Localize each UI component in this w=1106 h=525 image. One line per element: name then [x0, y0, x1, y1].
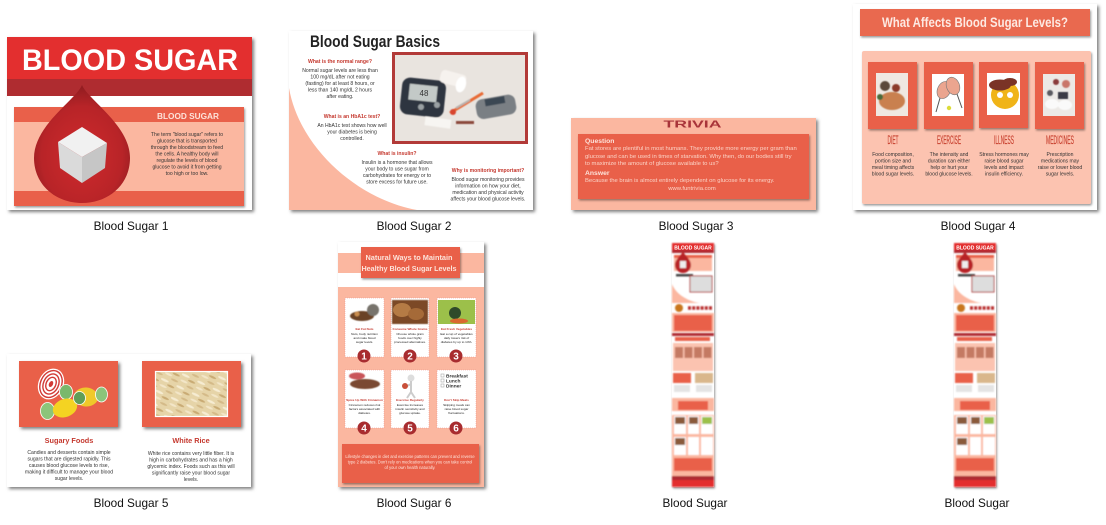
text block: HbA1c test	[317, 114, 387, 142]
text block: monitoring: information on how your diet,	[455, 184, 521, 190]
question and answer text: Answer	[585, 170, 610, 177]
step 1: sugar levels.	[356, 340, 373, 344]
step 3: daily lowers risk of	[444, 336, 469, 340]
caption: Blood Sugar 2: Blood Sugar 2	[377, 219, 451, 233]
card: exercise	[924, 62, 973, 178]
question and answer text: glucose and can be used in times of starvation. Why then, do our bodies still try	[585, 154, 792, 160]
text block: monitoring: Blood sugar monitoring provides	[451, 177, 525, 183]
panel: Blood Sugar 4 slide	[853, 4, 1097, 210]
card: medicines: sugar levels.	[1046, 172, 1074, 178]
step 5: glucose uptake.	[399, 411, 421, 415]
step 1: and make blood	[353, 336, 376, 340]
text block: normal range: less than 140 mg/dL 2 hours	[308, 88, 372, 94]
panel: Blood Sugar 3 trivia slide	[571, 118, 816, 210]
text block: white rice: glycemic index. Foods such as this will	[147, 464, 235, 470]
step 5	[391, 370, 429, 434]
step 6: Dinner	[446, 384, 461, 390]
header stripe	[7, 79, 252, 96]
text block: white rice: levels.	[184, 477, 198, 483]
text block: white rice: significantly raise your blood sugar	[152, 470, 230, 476]
text block: insulin: your body to use sugar from	[365, 166, 429, 172]
card: medicines: medications may	[1041, 158, 1080, 164]
description text: too high or too low.	[166, 171, 208, 177]
photo: glucose meter	[394, 54, 526, 142]
thumbnail title: BLOOD SUGAR	[674, 246, 712, 252]
step 3: Eat Fresh Vegetables	[441, 327, 472, 331]
step 5: insulin sensitivity and	[395, 407, 425, 411]
card: white rice image	[142, 361, 241, 427]
text block: sugary foods: sugar levels.	[55, 476, 83, 482]
text block: monitoring	[451, 168, 525, 202]
header: Natural Ways to Maintain	[366, 253, 452, 262]
icon: blood drop with sugar cube	[34, 85, 130, 203]
card: medicines	[1035, 62, 1084, 178]
step 6: Skipping meals can	[443, 403, 470, 407]
step 3	[437, 298, 476, 362]
text block: insulin: store excess for future use.	[366, 180, 428, 186]
step 6	[437, 370, 476, 434]
question and answer text	[585, 138, 797, 192]
card: exercise: help or hurt your	[930, 165, 968, 171]
step 2: Consume Whole Grains	[393, 327, 428, 331]
caption: Blood Sugar A: Blood Sugar	[663, 496, 728, 510]
text block: HbA1c test: controlled.	[340, 136, 364, 142]
step 5: 5	[407, 424, 413, 434]
description text: through the bloodstream to feed	[151, 145, 223, 151]
question and answer text: Because the brain is almost entirely dependent on glucose for its energy.	[585, 178, 775, 184]
text block: sugary foods: causes blood glucose levels to rise,	[29, 463, 109, 469]
text block: sugary foods: Candies and desserts contain simple	[27, 450, 111, 456]
text block: white rice: high in carbohydrates and has a high	[149, 458, 233, 464]
step 2: Choose whole grain	[396, 332, 424, 336]
text block: normal range	[302, 59, 378, 100]
card: sugary foods image	[19, 361, 118, 427]
text block: white rice: White rice contains very little fiber. It is	[148, 451, 235, 457]
content panel	[14, 107, 244, 206]
panel: full infographic thumbnail B	[954, 243, 996, 487]
content panel	[862, 51, 1091, 204]
thumbnail title: BLOOD SUGAR	[956, 246, 994, 252]
step 4	[345, 370, 384, 434]
card: exercise: The intensity and	[930, 152, 969, 158]
step 6: fluctuations.	[448, 411, 465, 415]
caption: Blood Sugar 3: Blood Sugar 3	[659, 219, 734, 233]
text block: normal range: after eating.	[327, 94, 353, 100]
card: medicines: Prescription	[1047, 152, 1074, 158]
step 6: Lunch	[446, 378, 460, 384]
text block: insulin: Insulin is a hormone that allows	[361, 160, 433, 166]
text block: normal range: What is the normal range?	[308, 59, 372, 65]
panel: Blood Sugar 6 slide	[338, 242, 484, 487]
step 4: factors associated with	[349, 407, 380, 411]
step 5: Exercise Regularly	[396, 398, 424, 402]
description text: regulate the levels of blood	[157, 158, 218, 164]
caption: Blood Sugar 4: Blood Sugar 4	[941, 219, 1016, 233]
photo: glucose meter: 48	[420, 89, 429, 98]
card: exercise: duration can either	[928, 158, 970, 164]
caption: Blood Sugar 1: Blood Sugar 1	[94, 219, 168, 233]
panel: full infographic thumbnail A	[672, 243, 714, 487]
text block: normal range: 100 mg/dL after not eating	[310, 74, 370, 80]
text block: HbA1c test: An HbA1c test shows how well	[317, 123, 387, 129]
title: BLOOD SUGAR	[22, 44, 238, 77]
description text: The term "blood sugar" refers to	[151, 132, 223, 138]
step 4: diabetes.	[358, 411, 371, 415]
footer message: of your own health naturally.	[385, 465, 436, 470]
step 3: diabetes by up to 14%.	[441, 340, 472, 344]
text block: monitoring: Why is monitoring important?	[452, 168, 524, 174]
trivia card	[578, 134, 809, 199]
step 6: 6	[453, 424, 459, 434]
text block: insulin	[361, 151, 433, 186]
step 6: raise blood sugar	[445, 407, 468, 411]
panel: Blood Sugar 2 slide	[289, 31, 533, 210]
text block: sugary foods: sugars that are digested rapidly. This	[27, 456, 111, 462]
step 4: 4	[361, 424, 367, 434]
footer message: type 2 diabetes. Don't rely on medications when you can take control	[348, 460, 472, 464]
text block: insulin: What is insulin?	[377, 151, 417, 157]
text block: sugary foods	[25, 436, 113, 482]
card: exercise: EXERCISE	[937, 133, 961, 147]
card: diet: blood sugar levels.	[872, 172, 914, 178]
step 2	[391, 298, 429, 362]
text block: sugary foods: making it difficult to manage your blood	[25, 470, 113, 476]
question and answer text: Fat stores are plentiful in most humans. They provide more energy per gram than	[585, 146, 797, 152]
description text: glucose that is transported	[157, 138, 217, 144]
step 6: Breakfast	[446, 374, 468, 380]
subheading band	[14, 107, 244, 122]
footer message	[342, 444, 479, 483]
text block: white rice: White Rice	[172, 436, 210, 445]
step 1	[345, 298, 384, 362]
card: diet: DIET	[888, 133, 899, 147]
text block: HbA1c test: your diabetes is being	[327, 130, 377, 136]
question and answer text: www.funtrivia.com	[667, 186, 716, 192]
description text: glucose to avoid it from getting	[152, 164, 222, 170]
footer message: Lifestyle changes in diet and exercise patterns can prevent and reverse	[345, 454, 475, 459]
curved background	[289, 88, 417, 210]
card: diet	[868, 62, 917, 178]
card: diet: Food composition,	[872, 152, 914, 158]
step 4: Spice Up With Cinnamon	[346, 398, 383, 402]
header band	[860, 9, 1090, 36]
step 1: Nuts, body nutrition	[351, 332, 378, 336]
step 2: foods over highly	[398, 336, 422, 340]
card: illness	[979, 62, 1029, 178]
header	[361, 247, 460, 278]
step 3: Eat a cup of vegetables	[440, 332, 473, 336]
step 5: Exercise Increases	[397, 403, 424, 407]
card: exercise: blood glucose levels.	[925, 172, 973, 178]
step 2: 2	[407, 352, 413, 362]
description text	[151, 132, 223, 177]
question and answer text: Question	[585, 138, 614, 145]
card: diet: portion size and	[875, 158, 911, 164]
caption: Blood Sugar 5: Blood Sugar 5	[94, 496, 169, 510]
question and answer text: to maximize the amount of glucose available to us?	[585, 161, 719, 167]
text block: monitoring: medication and physical activity	[452, 190, 524, 196]
step 1: Eat Fat Nuts	[355, 327, 374, 331]
trivia title: TRIVIA	[664, 120, 722, 130]
caption: Blood Sugar 6: Blood Sugar 6	[377, 496, 452, 510]
card: illness: ILLNESS	[994, 133, 1014, 147]
caption: Blood Sugar B: Blood Sugar	[945, 496, 1010, 510]
step 6: Don't Skip Meals	[444, 398, 469, 402]
description text: the cells. A healthy body will	[155, 152, 219, 158]
step 4: Cinnamon reduces risk	[349, 403, 381, 407]
subheading: BLOOD SUGAR	[157, 112, 219, 121]
title: Blood Sugar Basics	[310, 32, 440, 51]
text block: normal range: Normal sugar levels are less than	[302, 68, 378, 74]
card: illness: insulin efficiency.	[985, 172, 1023, 178]
title: What Affects Blood Sugar Levels?	[882, 14, 1068, 30]
step 1: 1	[361, 352, 367, 362]
card: illness: raise blood sugar	[984, 158, 1024, 164]
text block: white rice	[147, 436, 235, 483]
footer band	[14, 191, 244, 206]
card: illness: Stress hormones may	[979, 152, 1029, 158]
step 2: processed alternatives.	[394, 340, 426, 344]
panel: Blood Sugar 1 slide	[7, 37, 252, 210]
card: illness: levels and impact	[984, 165, 1024, 171]
header band	[7, 37, 252, 79]
text block: HbA1c test: What is an HbA1c test?	[324, 114, 380, 120]
step 3: 3	[453, 352, 459, 362]
panel: Blood Sugar 5 slide	[7, 354, 251, 487]
text block: insulin: carbohydrates for energy or to	[363, 173, 431, 179]
text block: sugary foods: Sugary Foods	[45, 436, 93, 445]
text block: monitoring: affects your blood glucose levels.	[451, 196, 525, 202]
card: medicines: raise or lower blood	[1038, 165, 1082, 171]
text block: normal range: (fasting) for at least 8 hours, or	[305, 81, 375, 87]
card: diet: meal timing affects	[872, 165, 915, 171]
header: Healthy Blood Sugar Levels	[362, 264, 456, 273]
